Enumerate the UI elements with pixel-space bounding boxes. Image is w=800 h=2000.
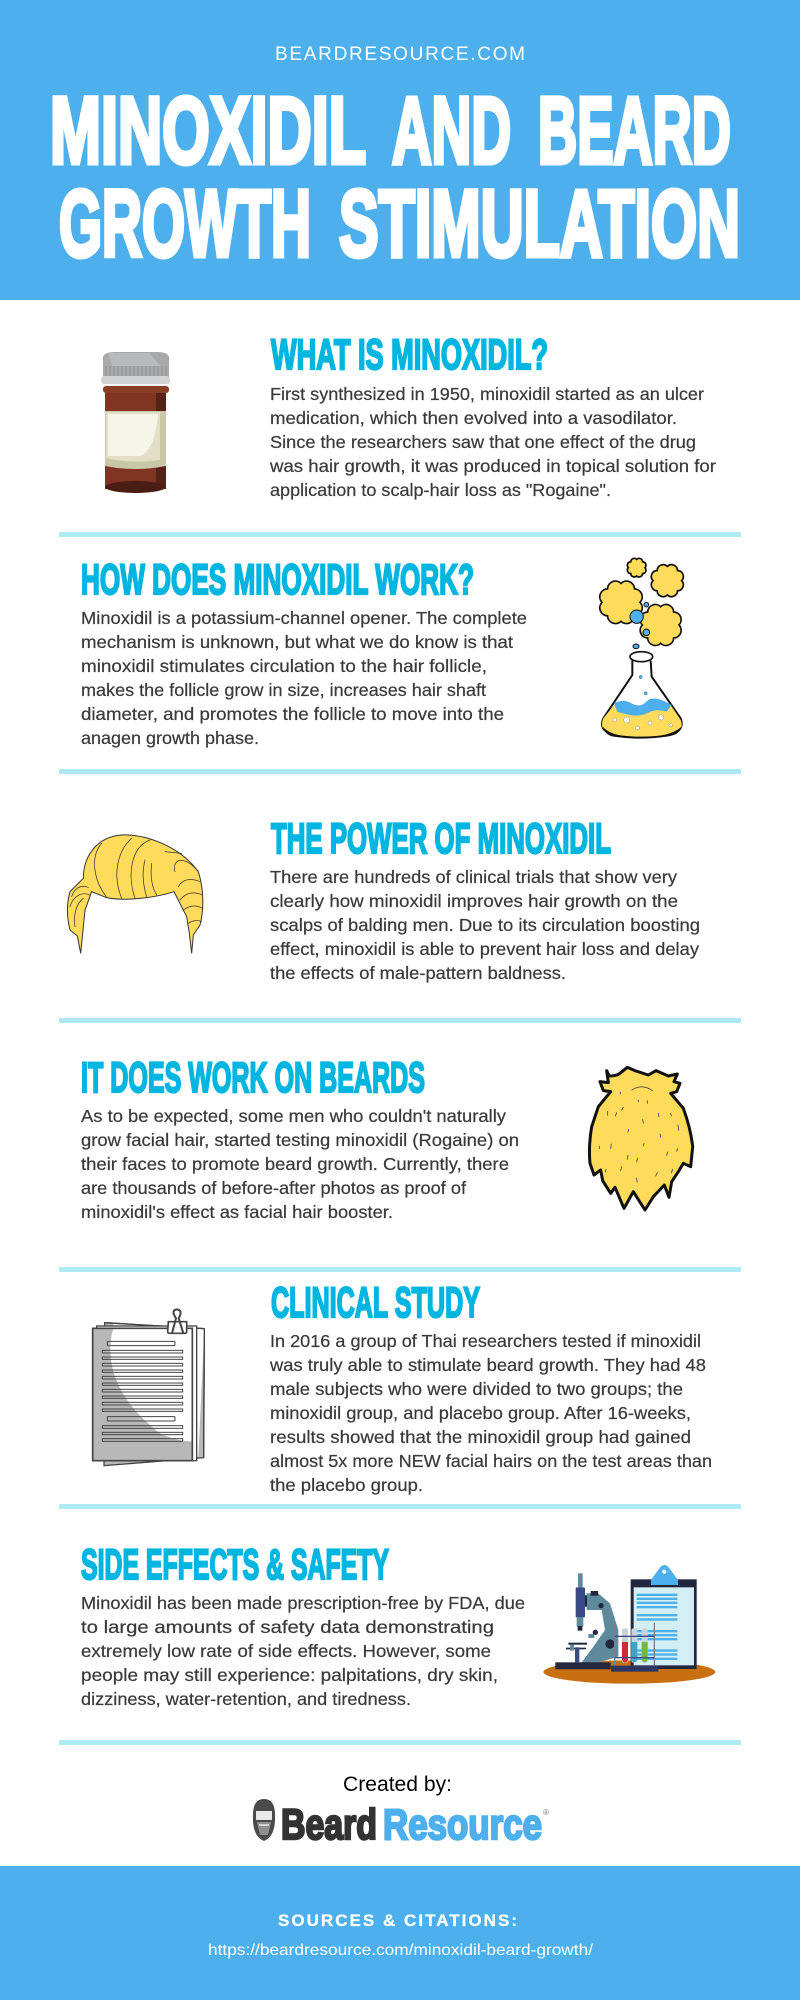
panel: what is minoxidil bbox=[101, 331, 716, 500]
text block: minoxidil stimulates circulation to the hair follicle, bbox=[81, 656, 487, 676]
text block: mechanism is unknown, but what we do know is that bbox=[81, 632, 513, 652]
text block: There are hundreds of clinical trials that show very bbox=[270, 867, 677, 887]
panel: header banner bbox=[0, 0, 800, 300]
heading: WHAT IS MINOXIDIL? bbox=[271, 331, 548, 379]
heading: IT DOES WORK ON BEARDS bbox=[81, 1054, 425, 1102]
icon: clipped document stack bbox=[93, 1309, 204, 1466]
text block: As to be expected, some men who couldn't naturally bbox=[81, 1106, 506, 1126]
text block: diameter, and promotes the follicle to move into the bbox=[81, 704, 504, 724]
text block: makes the follicle grow in size, increases hair shaft bbox=[81, 680, 486, 700]
title: GROWTH bbox=[59, 171, 311, 277]
icon: yellow hair bbox=[67, 835, 203, 953]
text block: was truly able to stimulate beard growth. They had 48 bbox=[269, 1355, 706, 1375]
text block: was hair growth, it was produced in topical solution for bbox=[269, 456, 716, 476]
text block bbox=[81, 1106, 519, 1222]
text block: clearly how minoxidil improves hair growth on the bbox=[270, 891, 678, 911]
text block: the placebo group. bbox=[270, 1475, 423, 1495]
created by label: Created by: bbox=[343, 1772, 452, 1796]
text block: grow facial hair, started testing minoxidil (Rogaine) on bbox=[81, 1130, 519, 1150]
text block: almost 5x more NEW facial hairs on the test areas than bbox=[270, 1451, 712, 1471]
text block: people may still experience: palpitations, dry skin, bbox=[81, 1665, 498, 1685]
text block: dizziness, water-retention, and tiredness. bbox=[81, 1689, 411, 1709]
text block: Minoxidil has been made prescription-free by FDA, due bbox=[81, 1593, 525, 1613]
icon: yellow beard bbox=[589, 1067, 693, 1210]
text block: In 2016 a group of Thai researchers tested if minoxidil bbox=[270, 1331, 701, 1351]
text block bbox=[81, 1593, 525, 1709]
text block: application to scalp-hair loss as "Rogaine". bbox=[270, 480, 611, 500]
title: AND bbox=[392, 78, 511, 184]
heading: HOW DOES MINOXIDIL WORK? bbox=[81, 556, 474, 604]
text block: Minoxidil is a potassium-channel opener. The complete bbox=[81, 608, 527, 628]
panel: footer sources bbox=[0, 1866, 800, 2000]
registered mark: ® bbox=[543, 1808, 549, 1817]
text block: extremely low rate of side effects. However, some bbox=[81, 1641, 491, 1661]
logo wordmark: Beard bbox=[281, 1801, 377, 1849]
text block bbox=[269, 1331, 712, 1495]
heading: CLINICAL STUDY bbox=[271, 1279, 480, 1327]
text block: to large amounts of safety data demonstrating bbox=[81, 1617, 494, 1637]
icon: microscope and clipboard bbox=[543, 1565, 715, 1684]
icon: bearded face logo bbox=[253, 1799, 275, 1841]
text block bbox=[81, 608, 527, 748]
text block: results showed that the minoxidil group had gained bbox=[270, 1427, 691, 1447]
logo wordmark: Resource bbox=[383, 1801, 542, 1849]
text block: anagen growth phase. bbox=[81, 728, 259, 748]
text block: minoxidil's effect as facial hair booster. bbox=[81, 1202, 393, 1222]
title: MINOXIDIL bbox=[50, 78, 365, 184]
panel: how does minoxidil work bbox=[81, 556, 683, 748]
source url: https://beardresource.com/minoxidil-beard-growth/ bbox=[208, 1942, 594, 1959]
text block: their faces to promote beard growth. Currently, there bbox=[81, 1154, 509, 1174]
text block bbox=[270, 867, 700, 983]
heading: SIDE EFFECTS & SAFETY bbox=[81, 1541, 389, 1589]
site name: BEARDRESOURCE.COM bbox=[275, 44, 525, 65]
panel: created by logo bbox=[253, 1772, 549, 1849]
sources heading: SOURCES & CITATIONS: bbox=[278, 1911, 517, 1930]
text block: scalps of balding men. Due to its circulation boosting bbox=[270, 915, 700, 935]
text block: male subjects who were divided to two groups; the bbox=[270, 1379, 683, 1399]
text block: Since the researchers saw that one effect of the drug bbox=[270, 432, 696, 452]
text block: minoxidil group, and placebo group. After 16-weeks, bbox=[270, 1403, 691, 1423]
text block bbox=[269, 384, 716, 500]
icon: medicine bottle bbox=[101, 352, 170, 493]
panel: it does work on beards bbox=[81, 1054, 693, 1222]
panel: clinical study bbox=[93, 1279, 712, 1495]
text block: effect, minoxidil is able to prevent hair loss and delay bbox=[270, 939, 699, 959]
text block: First synthesized in 1950, minoxidil started as an ulcer bbox=[270, 384, 704, 404]
text block: are thousands of before-after photos as proof of bbox=[81, 1178, 466, 1198]
text block: medication, which then evolved into a vasodilator. bbox=[270, 408, 677, 428]
icon: flask with clouds bbox=[600, 558, 683, 739]
text block: the effects of male-pattern baldness. bbox=[270, 963, 566, 983]
panel: side effects and safety bbox=[81, 1541, 715, 1709]
panel: the power of minoxidil bbox=[67, 815, 700, 983]
title bbox=[50, 78, 740, 277]
